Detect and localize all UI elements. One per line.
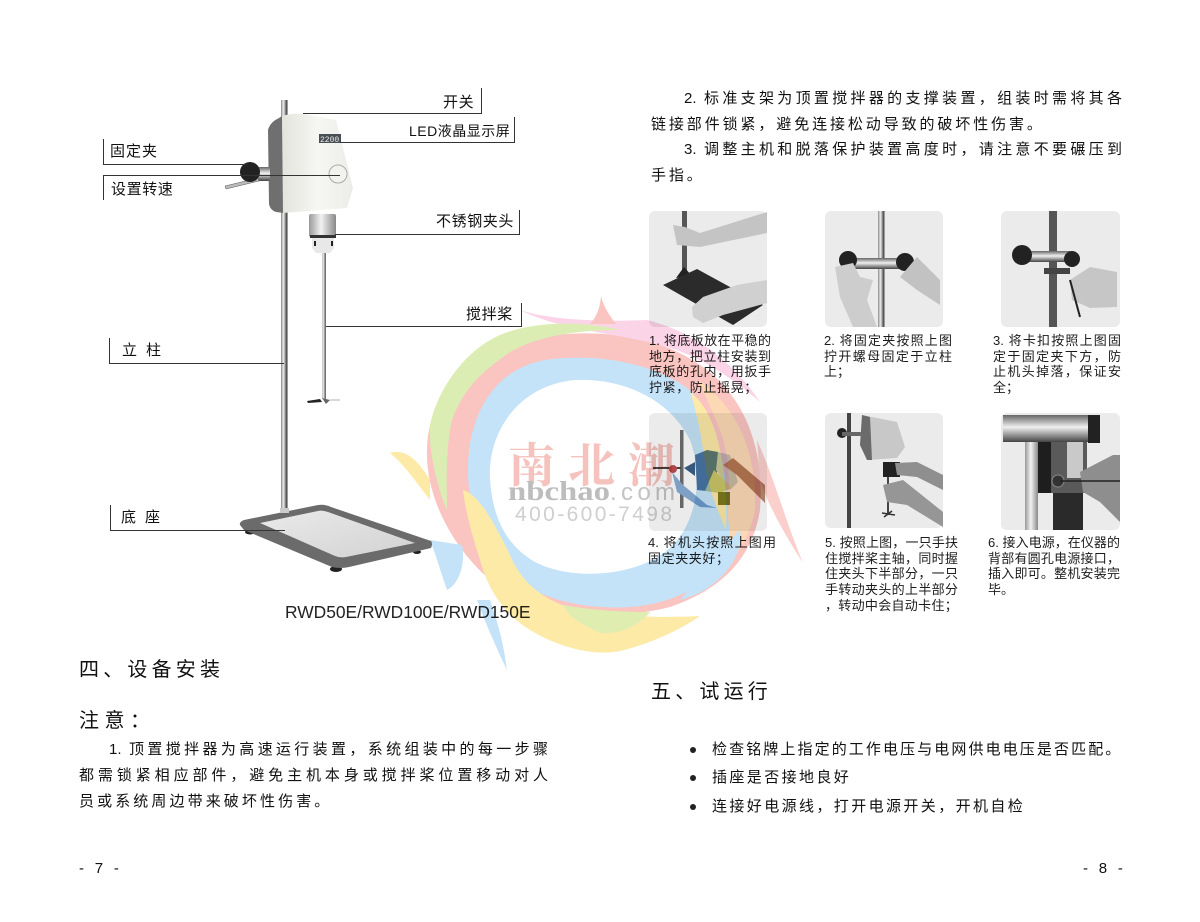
caption 5 [825,535,958,613]
text block: notes 2 and 3 [651,90,1122,184]
caption 1 [649,333,771,395]
caption 1: 地方，把立柱安装到 [649,349,771,364]
stand column [280,100,289,513]
caption 4 [648,535,776,566]
bullet 2: 插座是否接地良好 [712,769,851,786]
stirring paddle [307,253,340,404]
white centre [490,380,697,574]
green band [430,324,620,510]
caption 6: 毕。 [988,582,1014,597]
photo 1: fixing column to base [649,211,767,327]
caption 6: 插入即可。整机安装完 [988,566,1120,581]
pink streak [520,310,760,402]
caption 3: 全； [993,380,1019,395]
bullet 3: 连接好电源线，打开电源开关，开机自检 [712,798,1025,815]
bullet 1: 检查铭牌上指定的工作电压与电网供电电压是否匹配。 [712,741,1122,758]
caption 5: 5. 按照上图，一只手扶 [825,535,958,550]
text block: note 1 [79,741,548,810]
blue band [468,358,730,607]
blue drips [430,540,507,670]
label: 不锈钢夹头: 不锈钢夹头 [436,213,514,230]
yellow upper-right [690,392,726,530]
logo text: .com: .com [610,479,675,506]
callout leader lines [103,88,522,530]
caption 6: 背部有圆孔电源接口， [988,551,1120,566]
green bottom [563,605,650,633]
photo 4: fixing head in clamp [649,413,767,531]
logo text: nbchao.com: nbchao [508,476,610,506]
text block: notes 2 and 3: 3. 调整主机和脱落保护装置高度时，请注意不要碾压到 [684,141,1122,158]
caption 3 [993,333,1121,395]
clamp with knob [225,162,270,189]
text block: notes 2 and 3: 2. 标准支架为顶置搅拌器的支撑装置，组装时需将其各 [684,90,1122,107]
label: 固定夹: 固定夹 [110,143,158,160]
logo text: phone number: 400-600-7498 [515,503,672,526]
heading: notice: 注意： [79,710,156,732]
label: 开关: 开关 [443,94,474,111]
label: 设置转速: 设置转速 [111,181,173,198]
caption 3: 3. 将卡扣按照上图固 [993,333,1121,348]
label: 立柱: 立柱 [122,342,170,359]
photo 2: opening clamp nuts [825,211,943,327]
text block: notes 2 and 3: 手指。 [651,167,705,184]
caption 3: 止机头掉落，保证安 [993,364,1121,379]
stainless steel chuck [309,214,336,253]
label: 搅拌桨: 搅拌桨 [466,306,513,323]
caption 5: 住夹头下半部分，一只 [825,566,958,581]
red right splash [757,440,803,563]
text block: note 1: 1. 顶置搅拌器为高速运行装置，系统组装中的每一步骤 [109,741,548,758]
caption 6 [988,535,1120,597]
caption 2: 2. 将固定夹按照上图 [824,333,952,348]
base plate [240,505,432,572]
red band [427,333,761,614]
caption 5: 手转动夹头的上半部分 [825,582,958,597]
heading: section five: 五、试运行 [651,681,772,703]
yellow band [463,490,700,653]
caption 2 [824,333,952,379]
caption 2: 上； [824,364,850,379]
label: LED液晶显示屏: LED液晶显示屏 [409,123,510,139]
page number 8: - 8 - [1083,860,1126,877]
photo 5: tightening the chuck [825,413,943,528]
logo text: 南北潮: 南北潮 [508,429,675,496]
caption 6: 6. 接入电源，在仪器的 [988,535,1120,550]
caption 4: 4. 将机头按照上图用 [648,535,776,550]
left yellow splash [390,452,430,500]
top drop [590,296,616,324]
bullet list: trial run checks [690,741,1122,815]
motor head: 2200 [320,136,339,145]
caption 1: 底板的孔内，用扳手 [649,364,771,379]
caption 3: 定于固定夹下方，防 [993,349,1121,364]
caption 5: ，转动中会自动卡住； [825,598,958,613]
text block: note 1: 都需锁紧相应部件，避免主机本身或搅拌桨位置移动对人 [79,767,548,784]
heading: section four: 四、设备安装 [79,659,224,681]
label: 底座: 底座 [121,509,169,526]
blue lower-right [680,530,741,600]
page number 7: - 7 - [79,860,122,877]
photo 6: plugging in power [1001,413,1120,530]
model caption: RWD50E/RWD100E/RWD150E [285,602,530,622]
caption 2: 拧开螺母固定于立柱 [824,349,952,364]
photo 3: fitting the collar [1001,211,1120,327]
paint ring [390,296,803,670]
motor head [268,114,353,213]
caption 4: 固定夹夹好； [648,551,730,566]
caption 5: 住搅拌桨主轴，同时握 [825,551,958,566]
text block: note 1: 员或系统周边带来破坏性伤害。 [79,793,332,810]
text block: notes 2 and 3: 链接部件锁紧，避免连接松动导致的破坏性伤害。 [651,116,1045,133]
caption 1: 拧紧，防止摇晃； [649,380,758,395]
caption 1: 1. 将底板放在平稳的 [649,333,771,348]
peach right band [698,380,755,575]
